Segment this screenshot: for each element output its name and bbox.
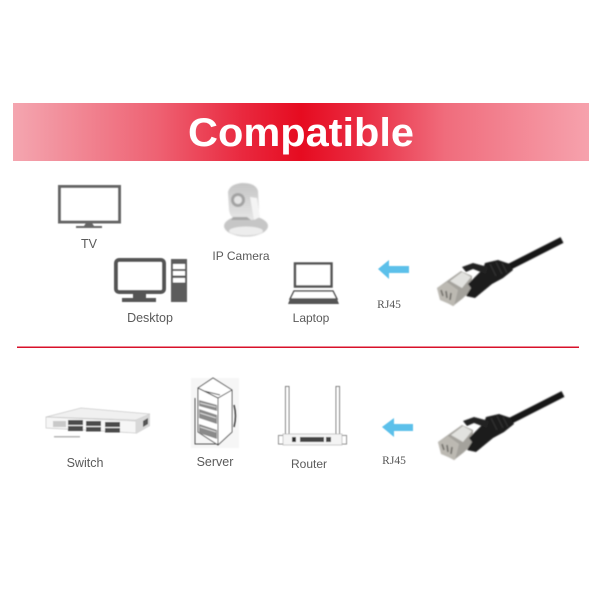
arrow: bottom connection xyxy=(382,418,413,437)
label: TV: TV xyxy=(81,237,98,251)
icon: IP camera xyxy=(224,183,268,236)
banner: Compatible xyxy=(13,103,589,161)
icon: router xyxy=(278,386,346,445)
icon: desktop computer xyxy=(116,259,187,302)
icon: RJ45 cable top xyxy=(437,240,562,306)
icon: server rack xyxy=(191,378,239,448)
label: Router: Router xyxy=(291,457,327,471)
label: Server: Server xyxy=(197,455,233,469)
heading: Compatible: Compatible xyxy=(188,111,414,155)
icon: network switch xyxy=(46,408,150,438)
icon: RJ45 cable bottom xyxy=(438,394,563,460)
label: Switch: Switch xyxy=(67,456,103,470)
label: Laptop: Laptop xyxy=(293,311,330,325)
label: RJ45 bottom: RJ45 xyxy=(382,455,406,467)
divider: red line xyxy=(17,346,579,348)
icon: TV xyxy=(60,186,120,228)
arrow: top connection xyxy=(378,260,409,279)
icon: laptop xyxy=(288,264,339,304)
label: Desktop: Desktop xyxy=(127,311,173,325)
label: RJ45 top: RJ45 xyxy=(377,299,401,311)
label: IP Camera: IP Camera xyxy=(212,249,270,263)
